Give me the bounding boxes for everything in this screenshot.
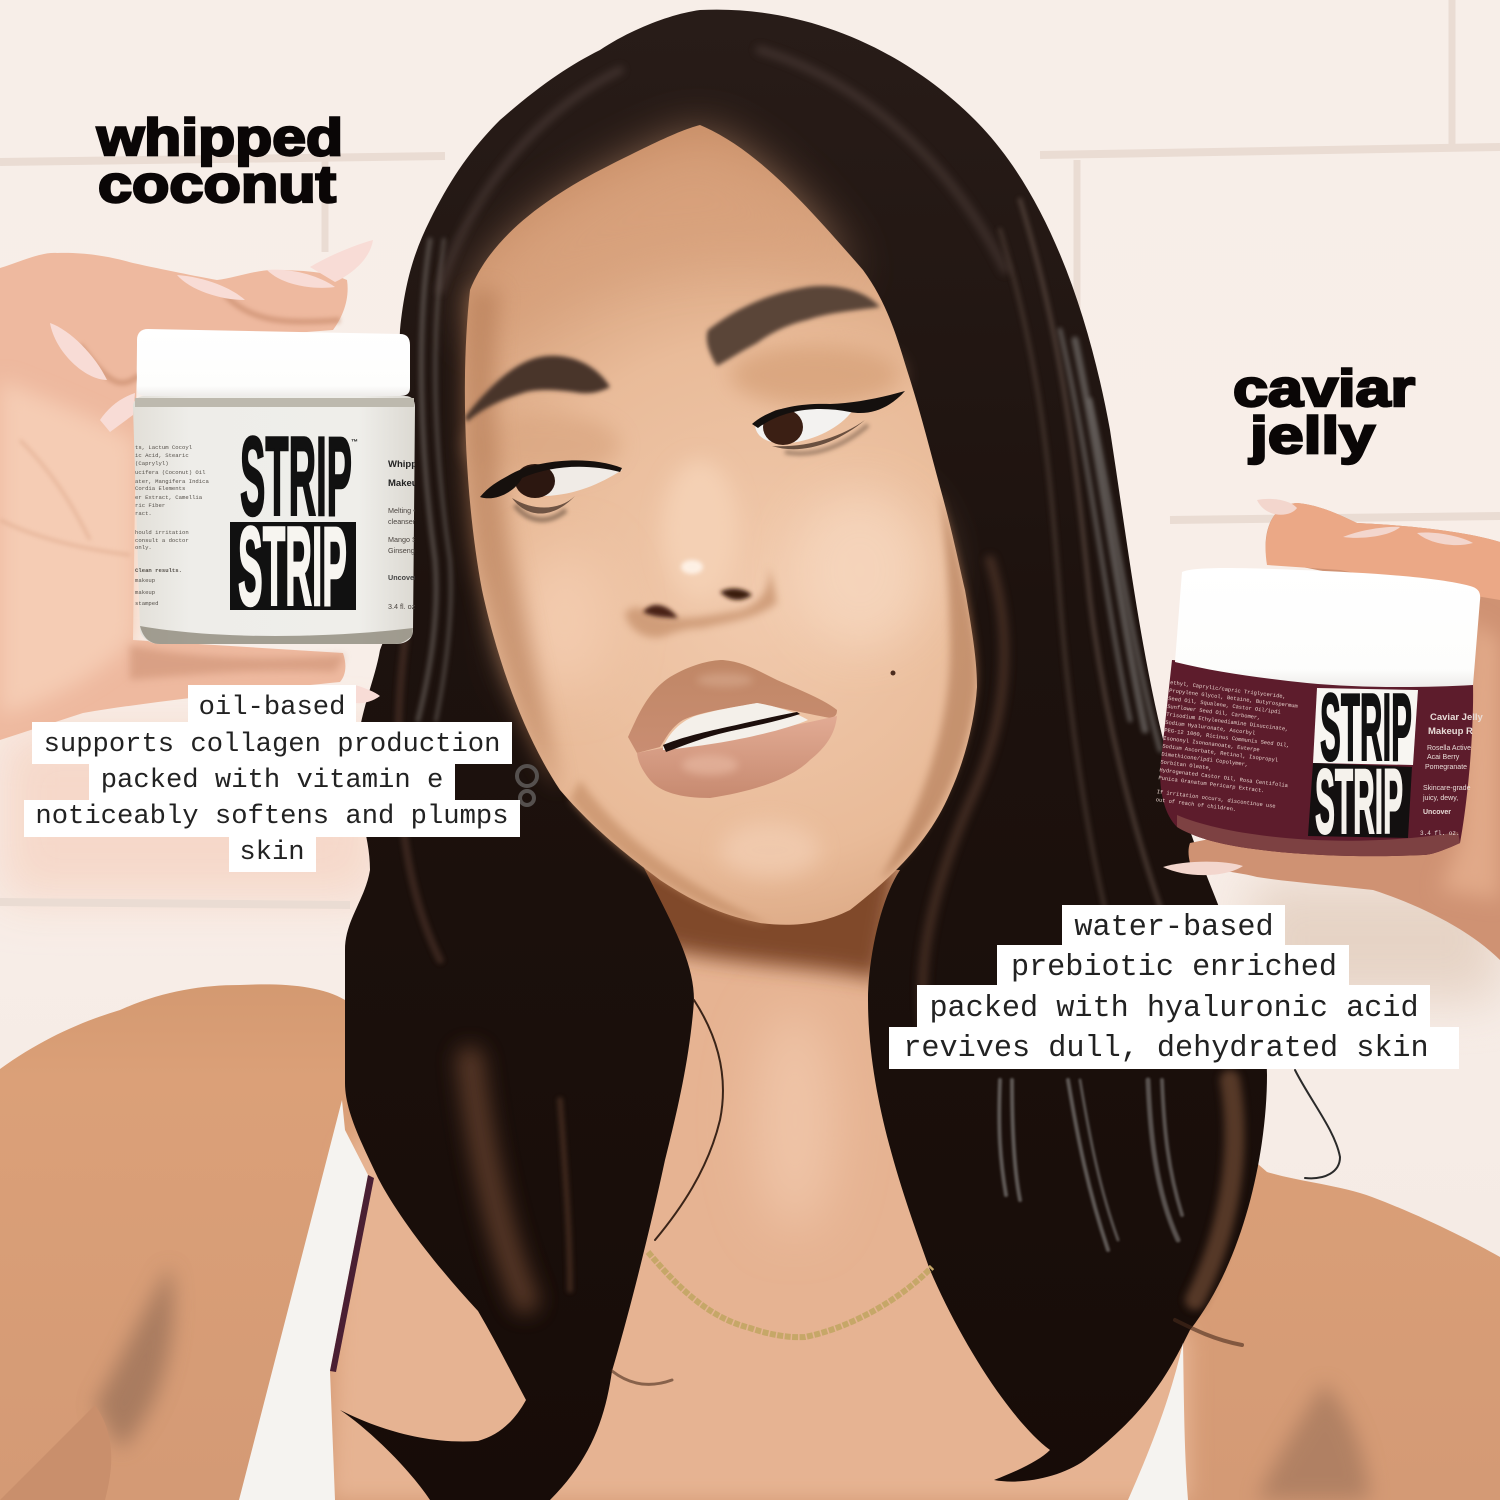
hair: main mass xyxy=(340,10,1267,1500)
eye: right xyxy=(752,391,905,453)
glass rim top xyxy=(135,398,414,407)
body: neck, shoulders and chest xyxy=(0,850,1500,1500)
palm xyxy=(0,380,135,715)
hair: highlight strands xyxy=(398,50,1340,1384)
left underarm xyxy=(0,1405,111,1500)
jelly glass rim xyxy=(1177,815,1460,856)
jar label: ingredients: ater, Mangifera Indica xyxy=(135,478,209,485)
jar label: product name: Skincare-grade xyxy=(1423,785,1471,792)
jar label: product name: Acai Berry xyxy=(1427,754,1460,761)
jar label: ingredients: consult a doctor xyxy=(135,537,189,544)
jar label: ingredients: PEG-12 1000, Ricinus Communis Seed Oil, xyxy=(1164,728,1290,749)
jar label: ingredients: Sunflower Seed Oil, Carbomer, xyxy=(1167,704,1261,721)
callout: caviar jelly benefits: prebiotic enriched xyxy=(1011,951,1337,985)
jar label: ingredients: ract. xyxy=(135,510,152,517)
necklace xyxy=(648,1252,932,1337)
jar label: ingredients: Sorbitan Oleate, xyxy=(1160,759,1212,772)
jar label: product name: Whipped xyxy=(388,459,428,470)
jar label: ingredients: ucifera (Coconut) Oil xyxy=(135,469,206,476)
callout: whipped coconut benefits xyxy=(24,685,520,872)
heading: whipped coconut: whipped xyxy=(96,109,343,167)
chin highlight xyxy=(720,822,820,878)
jar: whipped coconut: STRIP xyxy=(240,414,352,539)
jar label: ingredients: ic Acid, Stearic xyxy=(135,452,189,459)
glass rim bottom xyxy=(140,626,413,644)
callout: whipped coconut benefits: oil-based xyxy=(199,692,345,723)
jar label: ingredients: ts, Lactum Cocoyl xyxy=(135,444,193,451)
jar label: ingredients: Sodium Ascorbate, Retinol, Isopropyl xyxy=(1162,744,1278,764)
heading: whipped coconut xyxy=(96,109,343,214)
eye: left xyxy=(480,460,622,520)
jar label: logo top xyxy=(240,414,358,539)
fingernails xyxy=(50,240,380,703)
hair shadow on right cheek xyxy=(880,490,977,880)
callout: whipped coconut benefits: noticeably softens and plumps xyxy=(35,801,509,832)
eyebrow: left xyxy=(465,356,610,422)
top: white tank straps xyxy=(239,1100,1188,1500)
face xyxy=(464,125,977,925)
jar label: product name: juicy, dewy, xyxy=(1422,795,1458,802)
jar label: ingredients: Dimethicone/ipdi Copolymer, xyxy=(1161,751,1248,768)
jar label: product name: 3.4 fl. oz. xyxy=(388,602,417,611)
earring xyxy=(517,766,537,805)
jar label: product name xyxy=(388,460,415,609)
jar label: ingredients: out of reach of children. xyxy=(1155,797,1236,813)
callout: whipped coconut benefits: supports collagen production xyxy=(44,729,500,760)
jar label: ingredients: stamped xyxy=(135,600,158,607)
heading: caviar jelly: caviar xyxy=(1233,360,1415,418)
shadow under jar xyxy=(130,645,345,680)
left armpit shadow xyxy=(95,1265,173,1450)
neck highlight xyxy=(755,1010,835,1230)
jar label: ingredients: Propylene Glycol, Betaine, Butyrospermum xyxy=(1169,688,1298,710)
jar label: product name: 3.4 fl. oz. xyxy=(1420,830,1460,837)
jar label: ingredients: makeup xyxy=(135,589,155,596)
jar label: ingredients: (Caprylyl) xyxy=(135,460,169,467)
callout: caviar jelly benefits: packed with hyaluronic acid xyxy=(929,992,1419,1026)
palm highlight xyxy=(1440,620,1500,900)
left hand holding jar xyxy=(0,240,380,740)
jar label: ingredients: Clean results. xyxy=(135,567,182,574)
jar: caviar jelly xyxy=(1155,568,1484,856)
fingernails xyxy=(1163,499,1473,875)
right armpit shadow xyxy=(1257,1383,1370,1500)
jar label: product name: cleanser xyxy=(388,517,416,526)
jar label: product name: Caviar Jelly xyxy=(1430,712,1484,723)
mole xyxy=(890,670,896,676)
eye socket shading left xyxy=(470,413,620,477)
chin shadow on neck xyxy=(610,860,900,980)
callout: caviar jelly benefits xyxy=(889,905,1459,1069)
jar label: ingredients: hould irritation xyxy=(135,529,189,536)
nose xyxy=(625,460,777,638)
heading: whipped coconut: coconut xyxy=(98,156,336,214)
jar label: ingredients: If irritation occurs, discontinue use xyxy=(1156,789,1276,810)
callout: whipped coconut benefits: skin xyxy=(239,837,305,868)
jar: whipped coconut: STRIP xyxy=(238,504,347,629)
palm crease xyxy=(0,440,130,555)
jar lid xyxy=(137,329,410,396)
left cheek highlight xyxy=(520,550,610,690)
jar label: ingredients: ric Fiber xyxy=(135,502,165,509)
jar label: product name: Uncover xyxy=(388,573,417,582)
jar label: product name: Pomegranate xyxy=(1425,764,1467,771)
jar label: ingredients: er Extract, Camellia xyxy=(135,494,203,501)
callout: caviar jelly benefits: water-based xyxy=(1074,911,1274,945)
jar label: product name: Makeup R xyxy=(1428,726,1473,737)
jar label: ingredients: Seed Oil, Squalene, Castor Oil/ipdi xyxy=(1168,696,1281,716)
jar label: ingredients xyxy=(135,444,209,607)
heading: caviar jelly xyxy=(1233,360,1415,465)
eyebrow: right xyxy=(707,286,880,366)
jar label: product name: Melting • xyxy=(388,506,416,515)
callout: whipped coconut benefits: packed with vitamin e xyxy=(101,765,443,796)
jar label: product name: Uncover xyxy=(1423,809,1451,816)
fingers on lid xyxy=(1266,503,1500,600)
jar label: logo top: ™ xyxy=(351,439,358,446)
jar label: ingredients: Trisodium Ethylenediamine Disuccinate, xyxy=(1166,712,1289,733)
jar label: ingredients: Sodium Hyaluronate, Ascorbyl xyxy=(1165,720,1256,737)
jar: whipped coconut xyxy=(133,329,429,644)
jar label: ingredients: ethyl, Caprylic/capric Triglyceride, xyxy=(1170,680,1286,700)
heading: caviar jelly: jelly xyxy=(1249,407,1375,465)
right hand holding jar xyxy=(1163,499,1500,960)
jar label: ingredients: Isononyl Isononanoate, Euterpe xyxy=(1163,736,1260,753)
jar lid xyxy=(1175,568,1480,687)
jar label: product name: Rosella Active xyxy=(1427,745,1471,752)
jar label xyxy=(1308,674,1418,853)
lips xyxy=(628,660,837,798)
jar label: ingredients: Hydrogenated Castor Oil, Rosa Centifolia xyxy=(1159,767,1289,789)
jaw shading xyxy=(570,780,770,925)
jar label: ingredients: Punica Granatum Pericarp Extract. xyxy=(1158,775,1265,794)
eye socket shading right xyxy=(730,345,900,405)
forehead shading xyxy=(480,135,855,340)
cheek highlight xyxy=(790,490,930,650)
jar label: product name: Ginseng • xyxy=(388,546,420,555)
jar label: logo box xyxy=(230,504,356,629)
jar label: ingredients: makeup xyxy=(135,577,155,584)
jar label: ingredients: Cordia Elements xyxy=(135,485,185,492)
callout: caviar jelly benefits: revives dull, dehydrated skin xyxy=(903,1032,1429,1066)
shadow between fingers xyxy=(80,295,340,383)
jar label: product name: Mango Seed xyxy=(388,535,429,544)
hair shadow on left of face xyxy=(464,290,560,790)
chest skin xyxy=(330,850,1190,1500)
jar label: product name xyxy=(1420,712,1484,837)
jar label: ingredients xyxy=(1155,680,1300,819)
jar label: ingredients: only. xyxy=(135,544,152,551)
jar label: product name: Makeup xyxy=(388,478,424,489)
